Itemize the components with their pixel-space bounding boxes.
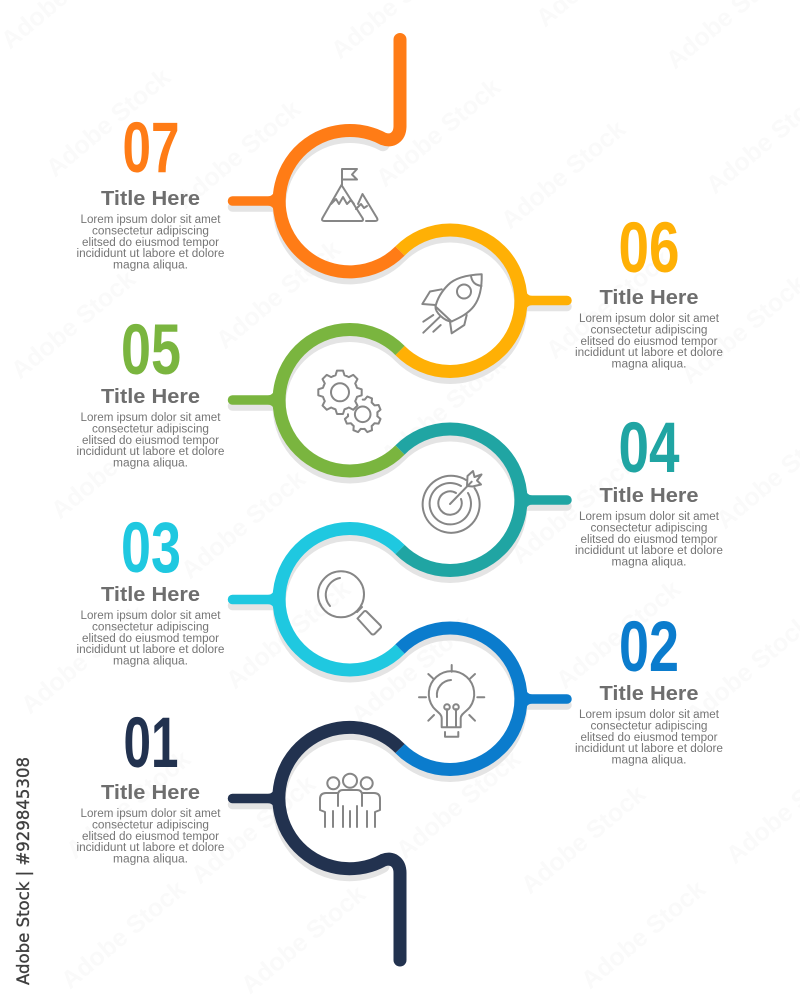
text: Adobe Stock (236, 880, 371, 1000)
step 03 number: 03 (121, 509, 181, 588)
step 04 text block: Lorem ipsum dolor sit amet (579, 511, 720, 523)
icon: group of people (320, 774, 380, 827)
step 06 text block: Lorem ipsum dolor sit amet (579, 313, 720, 325)
step 03 text block: Lorem ipsum dolor sit amet (80, 610, 221, 622)
icon: light bulb (419, 665, 484, 737)
step 01 text block: Lorem ipsum dolor sit amet (80, 808, 221, 820)
step 02 number: 02 (619, 608, 679, 687)
text: Adobe Stock (16, 600, 151, 720)
text: Adobe Stock (171, 95, 306, 215)
step 07 text block: consectetur adipiscing (92, 225, 209, 237)
step 05 text block: magna aliqua. (113, 458, 188, 470)
step 06 text block: incididunt ut labore et dolore (575, 347, 723, 359)
icon: gears (318, 371, 387, 438)
step 04 text block: incididunt ut labore et dolore (575, 545, 723, 557)
winding path shadow (232, 136, 567, 875)
step 02 text block: elitsed do eiusmod tempor (580, 732, 718, 744)
text: Adobe Stock (221, 575, 356, 695)
step 04 text block (575, 485, 723, 569)
step 04 text block: consectetur adipiscing (590, 522, 708, 534)
text: Adobe Stock (391, 745, 526, 865)
step 02 text block: magna aliqua. (612, 755, 686, 767)
text: Adobe Stock (376, 350, 511, 470)
icon: mountain with flag (322, 169, 377, 221)
text: Adobe Stock (186, 770, 321, 890)
step 02 text block: incididunt ut labore et dolore (575, 743, 723, 755)
step 06 text block (575, 287, 723, 371)
text: Adobe Stock (496, 115, 631, 235)
step 05 number: 05 (121, 311, 181, 390)
step 06 text block: Title Here (600, 287, 698, 309)
step 07 text block: Lorem ipsum dolor sit amet (80, 214, 221, 226)
step 02 blue ring segment (400, 628, 567, 769)
step 05 text block: incididunt ut labore et dolore (76, 446, 224, 458)
step 04 text block: elitsed do eiusmod tempor (580, 534, 718, 546)
text: Adobe Stock (61, 745, 196, 865)
step 05 text block (76, 386, 224, 470)
step 03 text block: Title Here (101, 584, 200, 606)
step 03 text block: elitsed do eiusmod tempor (82, 633, 219, 645)
step 07 text block: magna aliqua. (113, 260, 188, 272)
text: Adobe Stock (176, 465, 311, 585)
step 03 text block: magna aliqua. (113, 656, 188, 668)
step 03 text block: incididunt ut labore et dolore (76, 644, 224, 656)
step 07 text block: Title Here (101, 188, 200, 210)
text: Adobe Stock (551, 575, 686, 695)
text: Adobe Stock (211, 235, 346, 355)
text: Adobe Stock (41, 63, 176, 183)
step 05 text block: consectetur adipiscing (92, 423, 209, 435)
step 01 text block: Title Here (101, 782, 200, 804)
step 05 text block: Title Here (101, 386, 200, 408)
step 03 text block (76, 584, 224, 668)
step 01 text block: magna aliqua. (113, 854, 188, 866)
icon: rocket (422, 274, 482, 333)
step 01 text block: elitsed do eiusmod tempor (82, 831, 219, 843)
stock id credit: Adobe Stock | #929845308 (14, 757, 34, 985)
text: Adobe Stock (516, 780, 651, 900)
text: Adobe Stock (56, 875, 191, 995)
step 01 number: 01 (124, 704, 178, 783)
step 04 teal ring segment (400, 429, 567, 570)
step 04 text block: magna aliqua. (612, 557, 686, 569)
step 07 text block (76, 188, 224, 272)
step 04 number: 04 (618, 409, 680, 488)
text: Adobe Stock (506, 450, 641, 570)
step 07 number: 07 (122, 109, 180, 188)
text: Adobe Stock (541, 245, 676, 365)
step 05 text block: elitsed do eiusmod tempor (82, 435, 219, 447)
text: Adobe Stock (371, 73, 506, 193)
step 05 green ring segment (232, 330, 400, 471)
step 02 text block: Lorem ipsum dolor sit amet (579, 709, 720, 721)
step 07 orange ring segment (232, 33, 406, 272)
text: Adobe Stock (576, 875, 711, 995)
step 01 navy ring segment (232, 727, 406, 966)
text: Adobe Stock (346, 610, 481, 730)
step 01 text block: consectetur adipiscing (92, 819, 209, 831)
step 01 text block (76, 782, 224, 866)
step 02 text block: consectetur adipiscing (590, 720, 708, 732)
step 02 text block: Title Here (600, 683, 698, 705)
step 06 text block: elitsed do eiusmod tempor (580, 336, 718, 348)
text: Adobe Stock (46, 405, 181, 525)
step 06 yellow ring segment (400, 230, 567, 371)
icon: target with arrow (423, 471, 482, 533)
step 06 text block: magna aliqua. (612, 359, 686, 371)
step 06 text block: consectetur adipiscing (590, 324, 708, 336)
text: Adobe Stock (6, 265, 141, 385)
step 03 cyan ring segment (232, 529, 400, 670)
step 07 text block: incididunt ut labore et dolore (76, 248, 224, 260)
step 06 number: 06 (618, 209, 680, 288)
step 02 text block (575, 683, 723, 767)
step 05 text block: Lorem ipsum dolor sit amet (80, 412, 221, 424)
step 03 text block: consectetur adipiscing (92, 621, 209, 633)
icon: magnifying glass (318, 571, 381, 634)
step 01 text block: incididunt ut labore et dolore (76, 842, 224, 854)
step 07 text block: elitsed do eiusmod tempor (82, 237, 219, 249)
step 04 text block: Title Here (600, 485, 698, 507)
